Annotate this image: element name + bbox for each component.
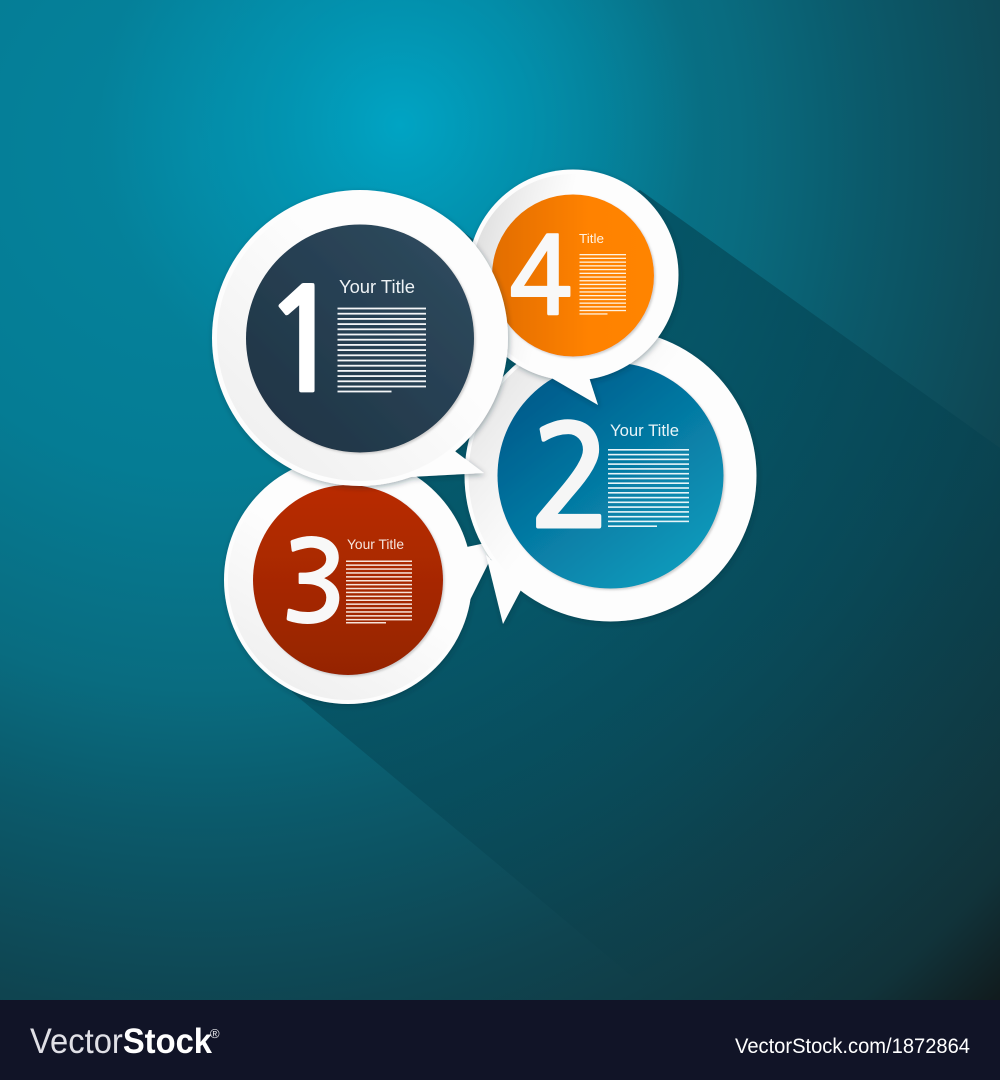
- step 3 number: 3: [280, 528, 348, 640]
- step 3 text lines: [346, 560, 412, 624]
- long flat shadow: [292, 190, 1000, 1000]
- step 4 title: Title: [579, 232, 604, 246]
- step 3 title: Your Title: [347, 536, 404, 552]
- step 4 orange disc: [492, 194, 654, 356]
- image id: VectorStock.com/1872864: [735, 1035, 970, 1058]
- step 4 circle: [468, 170, 678, 405]
- step 2 blue disc: [498, 362, 724, 588]
- step 2 number: 2: [528, 410, 614, 550]
- step 1 text lines: [338, 308, 426, 392]
- step 3 red disc: [253, 485, 443, 675]
- step 2 title: Your Title: [610, 421, 679, 440]
- step 2 white ring with pointer: [464, 330, 756, 624]
- step 4 number: 4: [508, 225, 573, 332]
- footer bar: [0, 1000, 1000, 1080]
- step 2 text lines: [608, 449, 689, 527]
- step 2 circle: [464, 330, 756, 624]
- step 3 white ring with pointer: [224, 456, 500, 704]
- step 1 number: 1: [260, 272, 347, 414]
- step 4 white ring with pointer: [468, 170, 678, 405]
- step 1 circle: [212, 190, 508, 486]
- registered mark: ®: [210, 1026, 220, 1041]
- VectorStock logo: VectorStock: [30, 1022, 212, 1061]
- step 3 circle: [224, 456, 500, 704]
- step 1 white ring with pointer: [212, 190, 508, 486]
- step 1 navy disc: [246, 224, 474, 452]
- step 1 title: Your Title: [339, 277, 415, 297]
- step 4 text lines: [580, 254, 626, 315]
- background glow: [100, 0, 700, 425]
